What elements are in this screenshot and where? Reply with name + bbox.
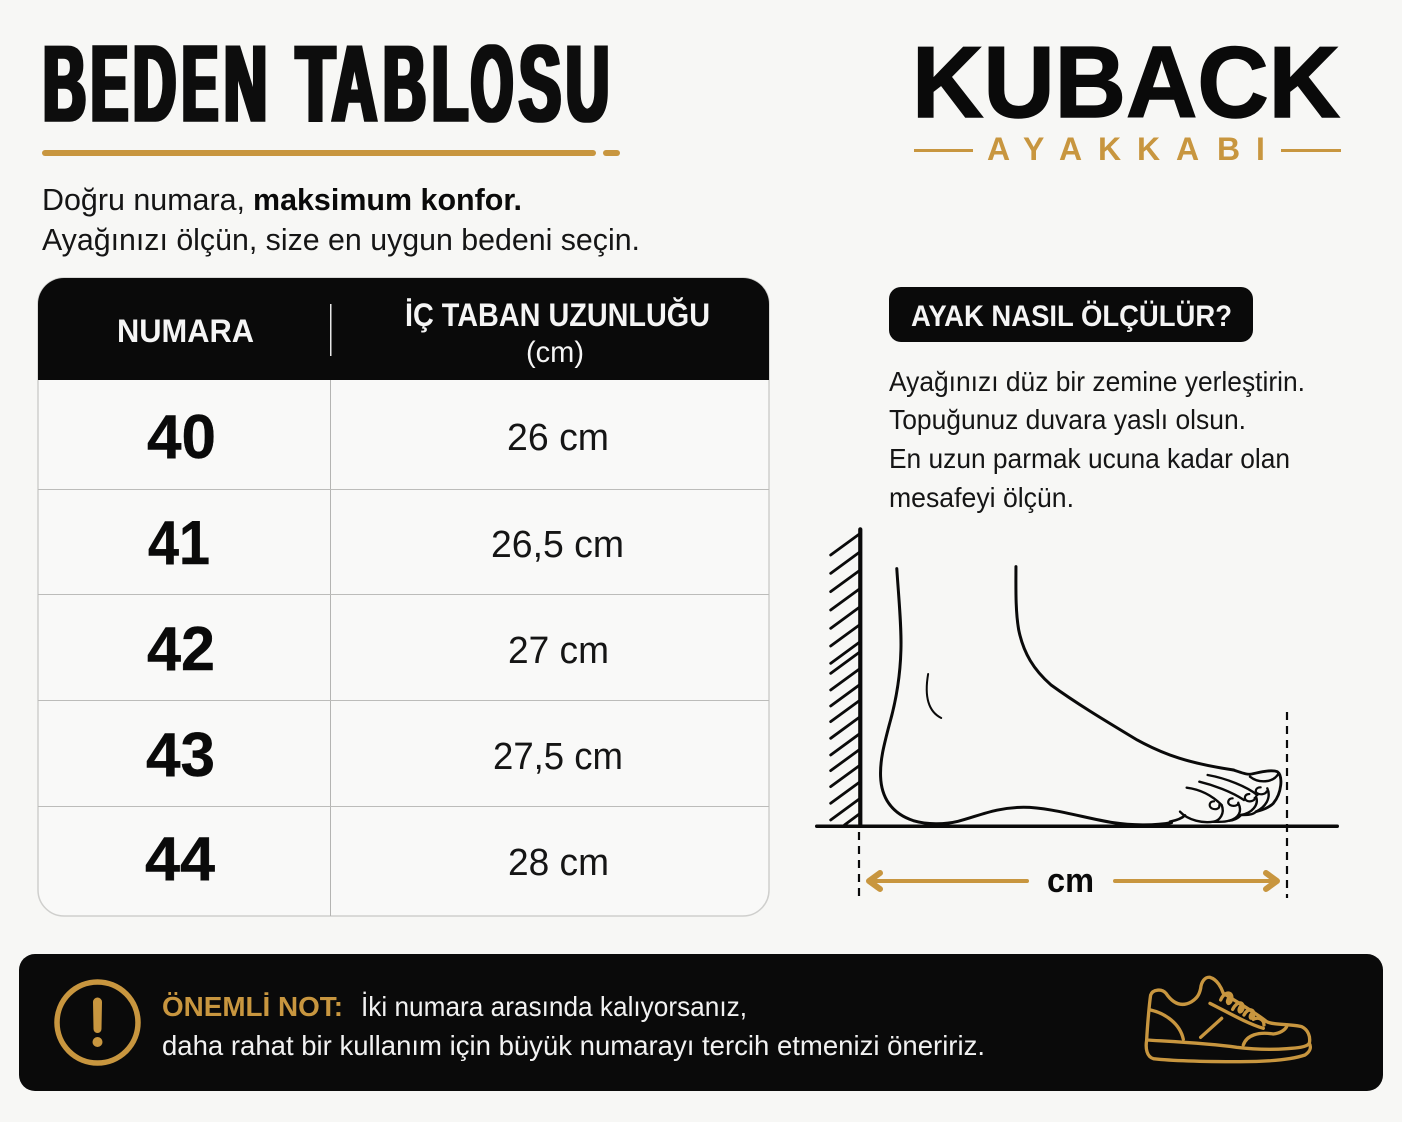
row 44 [145, 825, 609, 894]
row 42 [147, 615, 609, 684]
note text [162, 991, 985, 1061]
tagline: Doğru numara, [42, 182, 245, 217]
heading: how to measure [889, 287, 1253, 342]
tagline: maksimum konfor. [253, 182, 522, 217]
measure guide lines [859, 712, 1287, 898]
row 42: 42 [147, 615, 215, 684]
title: O [471, 23, 513, 145]
title: B [43, 23, 86, 145]
note text: İki numara arasında kalıyorsanız, [361, 991, 747, 1022]
tagline: Ayağınızı ölçün, size en uygun bedeni seçin. [42, 222, 640, 257]
icon: sneaker [1146, 977, 1310, 1062]
instructions text: Ayağınızı düz bir zemine yerleştirin. [889, 366, 1305, 397]
ground line [815, 824, 1339, 828]
instructions text [889, 366, 1305, 513]
logo: Kuback Ayakkabi: AYAKKABI [987, 131, 1265, 167]
icon: foot outline [881, 567, 1234, 825]
panel: size table [38, 278, 769, 916]
instructions text: mesafeyi ölçün. [889, 482, 1074, 513]
logo: Kuback Ayakkabi: KUBACK [912, 27, 1340, 139]
title: L [432, 23, 468, 145]
note text: daha rahat bir kullanım için büyük numarayı tercih etmenizi öneririz. [162, 1030, 985, 1061]
title: T [296, 23, 335, 145]
title: B [383, 23, 426, 145]
row 43: 27,5 cm [493, 736, 623, 778]
table header: İÇ TABAN UZUNLUĞU [405, 297, 710, 333]
title: E [182, 23, 218, 145]
row 43: 43 [146, 721, 215, 790]
row 44: 28 cm [508, 842, 609, 884]
title: S [519, 23, 561, 145]
instructions text: Topuğunuz duvara yaslı olsun. [889, 404, 1246, 435]
title: A [332, 23, 377, 145]
title [42, 23, 620, 156]
row 43 [146, 721, 623, 790]
cm label: cm [1047, 862, 1094, 900]
row 44: 44 [145, 825, 216, 894]
row 40: 40 [147, 403, 216, 472]
title: E [91, 23, 128, 145]
tagline [42, 182, 640, 257]
instructions text: En uzun parmak ucuna kadar olan [889, 443, 1290, 474]
arrow: left [869, 873, 1027, 889]
icon: wall with hatching [831, 529, 860, 825]
icon: toes [1170, 770, 1281, 822]
row 42: 27 cm [508, 630, 609, 672]
row 41: 41 [148, 509, 210, 578]
row 40 [147, 403, 609, 472]
row 41 [148, 509, 624, 578]
table header: (cm) [526, 336, 584, 369]
table header: NUMARA [117, 313, 254, 349]
panel: important note [19, 954, 1383, 1091]
arrow: right [1115, 873, 1277, 889]
heading: how to measure: AYAK NASIL ÖLÇÜLÜR? [911, 300, 1232, 333]
foot measuring diagram [815, 529, 1339, 900]
title: N [224, 23, 267, 145]
icon: exclamation [57, 982, 138, 1063]
note text: ÖNEMLİ NOT: [162, 991, 343, 1022]
title: U [566, 23, 609, 145]
row 41: 26,5 cm [491, 524, 624, 566]
title: D [133, 23, 176, 145]
table header [38, 278, 769, 380]
row 40: 26 cm [507, 417, 609, 459]
